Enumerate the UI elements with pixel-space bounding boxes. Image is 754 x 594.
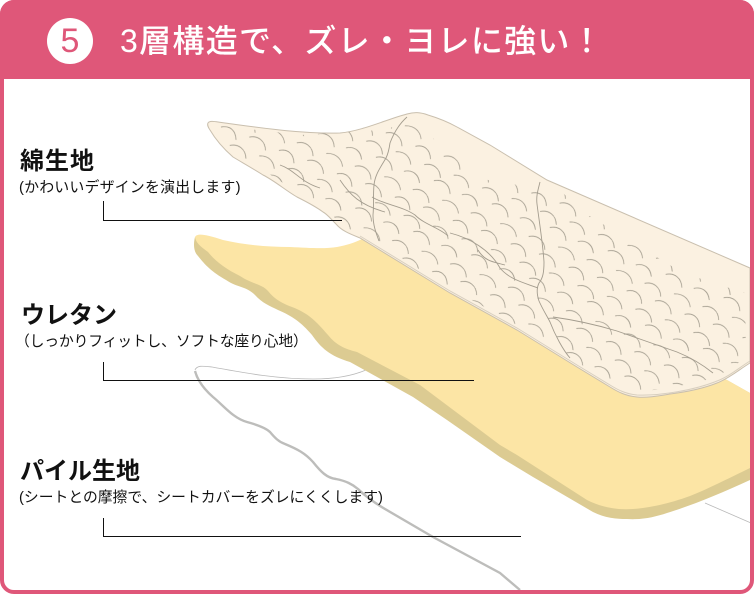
- step number badge: [47, 18, 93, 64]
- layer: pile fabric: [195, 366, 751, 590]
- heading: urethane: ウレタン: [21, 302, 117, 329]
- layer: urethane: [194, 235, 750, 519]
- title: 3層構造で、ズレ・ヨレに強い！: [120, 23, 604, 59]
- step number badge: 5: [61, 22, 79, 60]
- header band: [0, 0, 754, 79]
- description: pile fabric: (シートとの摩擦で、シートカバーをズレにくくします): [19, 490, 383, 506]
- description: cotton: (かわいいデザインを演出します): [19, 180, 241, 196]
- heading: cotton: 綿生地: [20, 148, 95, 175]
- layer: cotton: [207, 112, 750, 398]
- description: urethane: （しっかりフィットし、ソフトな座り心地）: [15, 334, 308, 350]
- illustration: three layer sheet: [103, 112, 750, 590]
- leader lines: [104, 201, 521, 536]
- heading: pile fabric: パイル生地: [20, 458, 140, 485]
